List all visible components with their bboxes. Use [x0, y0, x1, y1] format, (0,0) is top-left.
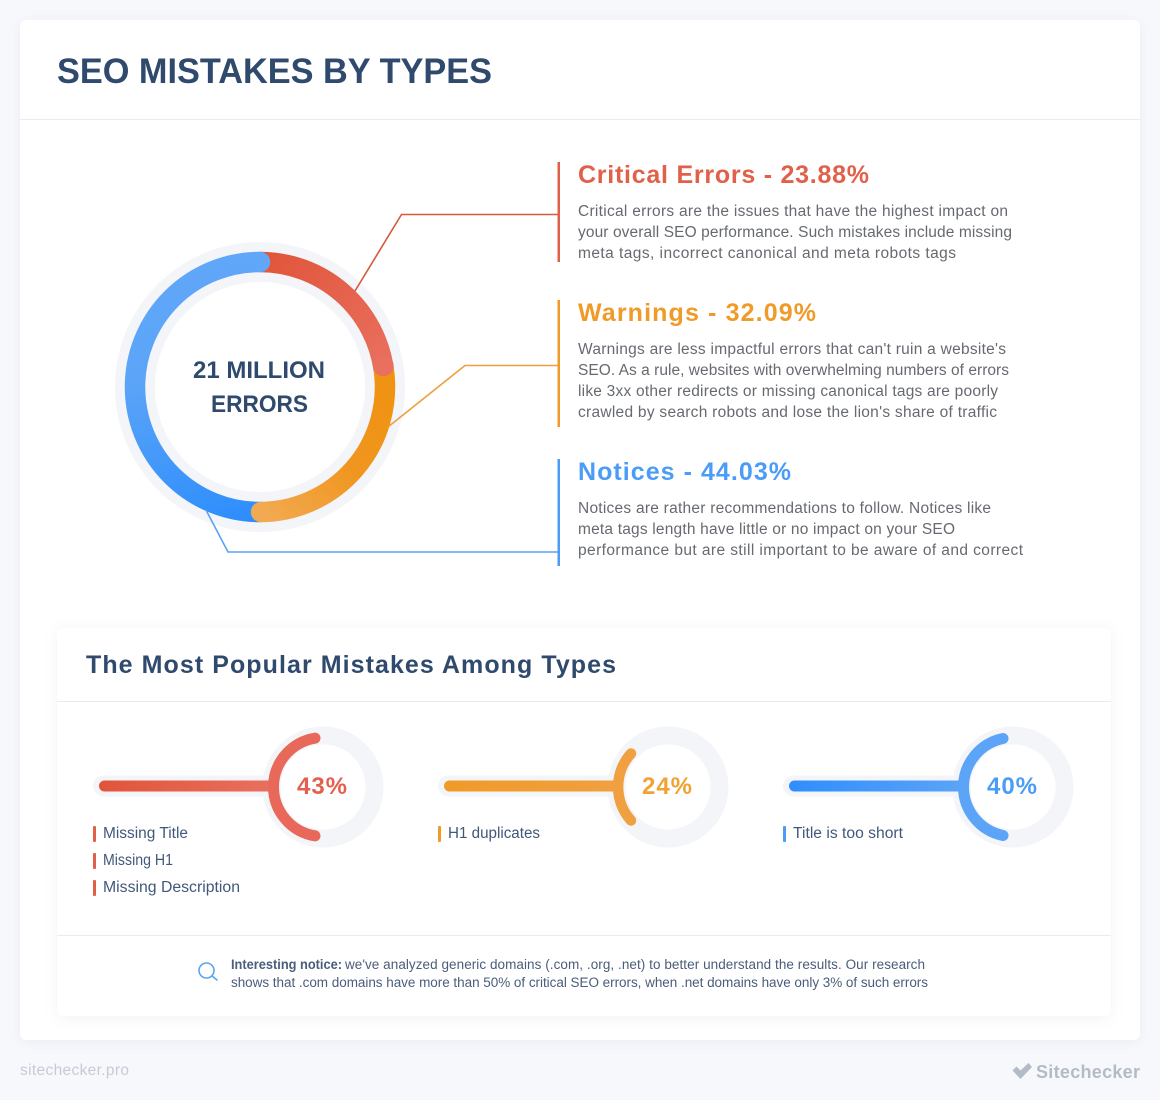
text block: notices: Notices - 44.03% [578, 458, 791, 486]
text block: critical errors: meta tags, incorrect canonical and meta robots tags [578, 245, 956, 262]
icon: check mark [1012, 1063, 1032, 1079]
text block: notices: Notices are rather recommendations to follow. Notices like [578, 500, 991, 517]
icon: magnifier [199, 963, 217, 980]
text block: notices [558, 458, 1024, 566]
text block: critical errors: Critical Errors - 23.88% [578, 161, 869, 189]
interesting notice text: Interesting notice: [231, 957, 342, 972]
list: red mistakes: Missing Title [103, 825, 188, 842]
list: red mistakes: Missing Description [103, 879, 240, 896]
gauge: 43%: 43% [297, 773, 347, 800]
text block: warnings: Warnings are less impactful errors that can't ruin a website's [578, 341, 1006, 358]
footer: site url: sitechecker.pro [20, 1062, 129, 1079]
title: SEO MISTAKES BY TYPES [57, 52, 492, 91]
text block: warnings: crawled by search robots and lose the lion's share of traffic [578, 404, 997, 421]
connector: critical errors [355, 214, 558, 291]
text block: warnings: SEO. As a rule, websites with overwhelming numbers of errors [578, 362, 1009, 379]
gauge: 40%: 40% [987, 773, 1037, 800]
text block: warnings: like 3xx other redirects or missing canonical tags are poorly [578, 383, 998, 400]
interesting notice text [231, 957, 928, 990]
list: orange mistakes: H1 duplicates [448, 825, 540, 842]
text block: warnings: Warnings - 32.09% [578, 299, 816, 327]
list: red mistakes: Missing H1 [103, 852, 173, 869]
text block: warnings [558, 299, 1009, 427]
text block: critical errors: your overall SEO performance. Such mistakes include missing [578, 224, 1012, 241]
text block: notices: meta tags length have little or no impact on your SEO [578, 521, 955, 538]
list: red mistakes [93, 825, 240, 896]
text block: critical errors [558, 161, 1012, 262]
interesting notice text: shows that .com domains have more than 50% of critical SEO errors, when .net domains have only 3% of such errors [231, 975, 928, 990]
connector: warnings [388, 366, 558, 427]
interesting notice text: we've analyzed generic domains (.com, .org, .net) to better understand the results. Our research [344, 957, 925, 972]
footer: logo: Sitechecker [1036, 1062, 1140, 1082]
donut chart: 21 million errors [120, 247, 400, 527]
text block: critical errors: Critical errors are the issues that have the highest impact on [578, 203, 1008, 220]
list: blue mistakes: Title is too short [793, 825, 904, 842]
panel: most popular mistakes [57, 628, 1111, 1016]
gauge: 24% [438, 736, 720, 838]
donut chart: 21 million errors: 21 MILLION [193, 357, 325, 384]
panel heading: The Most Popular Mistakes Among Types [86, 651, 616, 679]
connector: notices [206, 510, 558, 552]
gauge: 40% [783, 736, 1064, 838]
donut chart: 21 million errors: ERRORS [211, 391, 308, 418]
text block: notices: performance but are still important to be aware of and correct [578, 542, 1024, 559]
gauge: 24%: 24% [642, 773, 692, 800]
gauge: 43% [93, 736, 374, 838]
